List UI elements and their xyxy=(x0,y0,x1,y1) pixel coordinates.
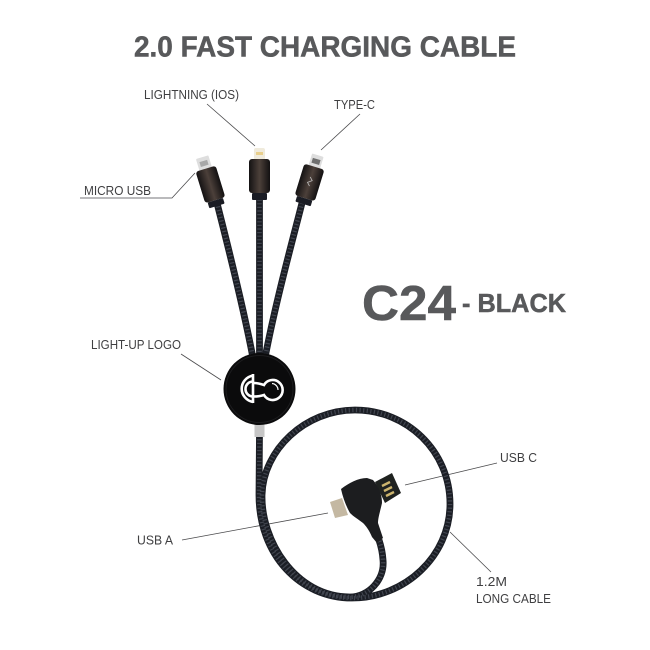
label: USB C xyxy=(405,450,537,485)
heading: model name: C24 xyxy=(362,277,456,331)
label: light-up logo: LIGHT-UP LOGO xyxy=(91,337,181,352)
connector: type-C xyxy=(293,152,328,207)
label: cable length xyxy=(450,532,551,606)
cable: three upper branches xyxy=(217,196,302,358)
cable: long loop xyxy=(259,410,450,598)
heading: model name: - BLACK xyxy=(462,288,566,318)
label: lightning: LIGHTNING (IOS) xyxy=(144,87,239,102)
title: 2.0 FAST CHARGING CABLE xyxy=(134,32,516,64)
label: cable length: LONG CABLE xyxy=(476,591,551,606)
label: type-C xyxy=(321,97,375,150)
connector: USB A and USB C head xyxy=(330,473,401,543)
label: lightning xyxy=(144,87,255,146)
heading: model name xyxy=(362,277,566,331)
connector: micro USB xyxy=(192,154,227,209)
silver collar below logo disc xyxy=(254,422,264,437)
label: micro USB xyxy=(80,173,195,198)
label: USB A xyxy=(137,513,328,548)
label: light-up logo xyxy=(91,337,221,380)
icon: light-up logo disc xyxy=(224,353,296,425)
label: cable length: 1.2M xyxy=(476,574,507,589)
label: USB C: USB C xyxy=(500,450,537,465)
label: micro USB: MICRO USB xyxy=(84,183,151,198)
label: type-C: TYPE-C xyxy=(334,97,375,112)
connector: lightning xyxy=(249,148,270,200)
label: USB A: USB A xyxy=(137,532,173,548)
